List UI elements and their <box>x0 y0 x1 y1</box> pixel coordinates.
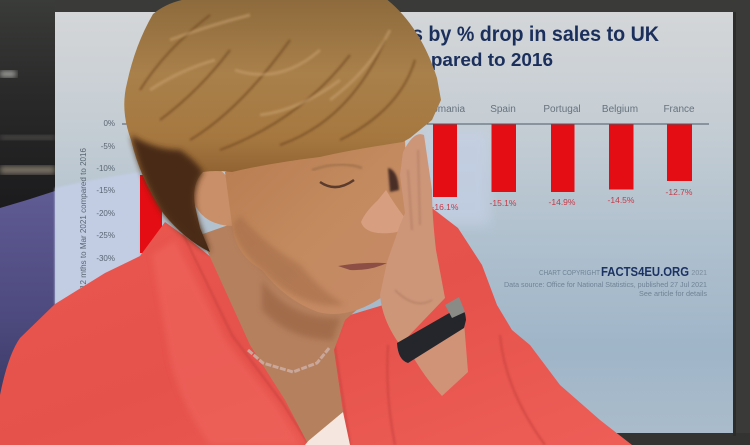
finger lines <box>395 150 432 303</box>
bars <box>140 124 692 253</box>
y axis title: 12 mths to Mar 2021 compared to 2016 <box>79 148 88 289</box>
axis line <box>122 124 709 125</box>
hair dark back <box>131 135 210 252</box>
bar values: -15.1% <box>490 198 517 208</box>
y axis labels: -25% <box>96 231 115 240</box>
bar values: -14.9% <box>549 197 576 207</box>
chart credits: See article for details <box>639 289 707 298</box>
lapel highlight <box>152 240 300 445</box>
country labels: France <box>663 104 695 115</box>
chart credits <box>504 264 707 298</box>
jacket <box>0 208 632 445</box>
purple seat <box>0 191 55 400</box>
y axis labels: -5% <box>101 142 115 151</box>
ear <box>192 165 232 226</box>
hair highlights <box>150 15 390 115</box>
neck <box>200 200 380 442</box>
bar values: -14.5% <box>608 195 635 205</box>
eyebrow <box>312 164 362 170</box>
chart title: mpared to 2016 <box>414 50 553 70</box>
chart credits: FACTS4EU.ORG <box>601 264 689 279</box>
nose <box>361 190 405 233</box>
country labels <box>425 104 695 115</box>
necklace <box>248 347 330 372</box>
country labels: Portugal <box>543 104 581 115</box>
y axis labels: -20% <box>96 209 115 218</box>
eye <box>320 180 354 187</box>
country labels: Spain <box>490 104 516 115</box>
y axis labels: -10% <box>96 164 115 173</box>
country labels: Belgium <box>602 104 638 115</box>
chart credits: CHART COPYRIGHT <box>539 270 601 277</box>
forearm <box>412 322 468 396</box>
panel right edge shadow <box>733 12 736 436</box>
lapel shading <box>183 234 545 445</box>
chart credits: Data source: Office for National Statistics, published 27 Jul 2021 <box>504 280 707 289</box>
chart credits: 2021 <box>691 270 707 277</box>
y axis labels <box>96 119 115 263</box>
white shirt <box>305 412 350 445</box>
bar values: -12.7% <box>666 187 693 197</box>
wrist watch <box>397 297 466 363</box>
y axis labels: -15% <box>96 186 115 195</box>
hair <box>124 0 441 252</box>
face <box>225 140 408 314</box>
mouth <box>338 263 387 270</box>
y axis labels: -30% <box>96 254 115 263</box>
chart title: s by % drop in sales to UK <box>412 22 659 46</box>
country labels: Romania <box>425 104 465 115</box>
chart title <box>412 22 659 70</box>
bar values <box>432 187 693 212</box>
neck shading <box>262 280 340 340</box>
bar values: -16.1% <box>432 202 459 212</box>
hair fringe strands <box>140 15 415 150</box>
eye shadow <box>388 168 399 192</box>
y axis labels: 0% <box>103 119 115 128</box>
cheek shading <box>232 215 345 306</box>
hand <box>380 134 445 345</box>
